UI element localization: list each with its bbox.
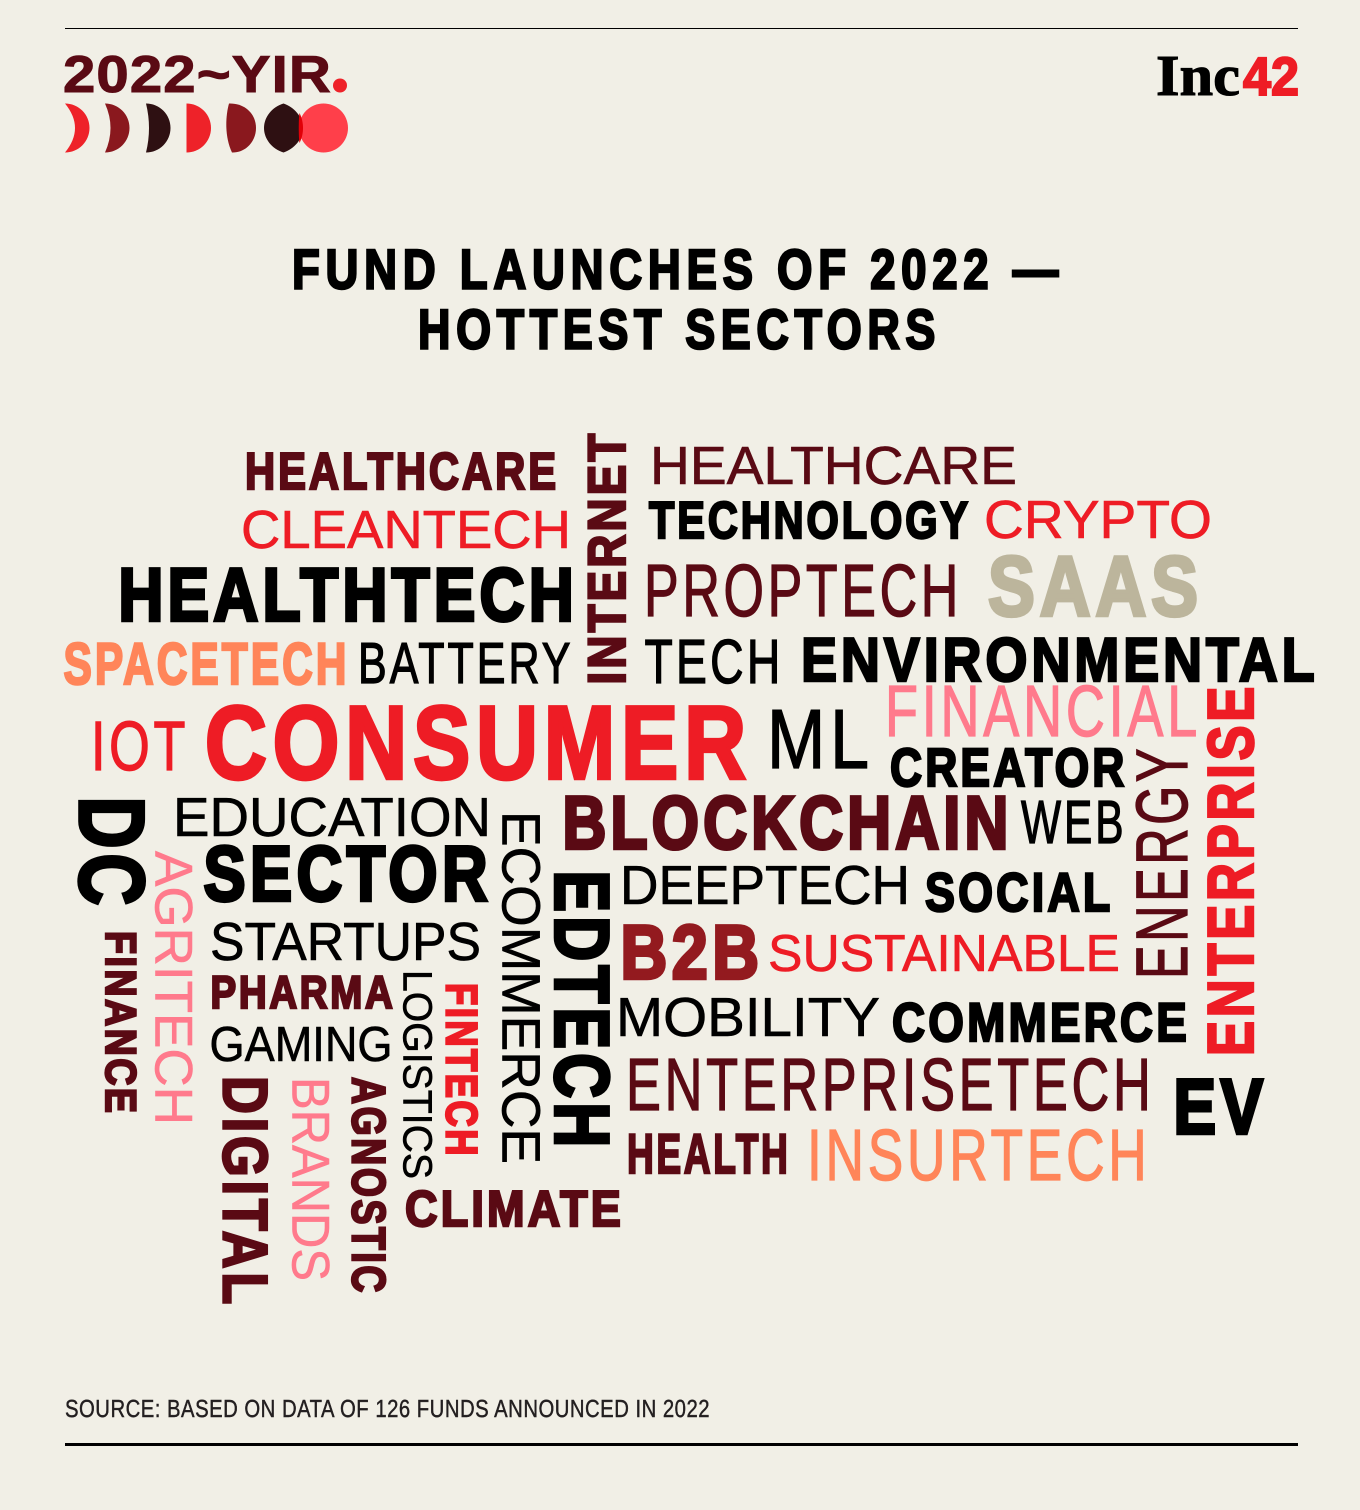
logo wordmark: 2022~YIR <box>63 46 332 104</box>
logo dot <box>333 78 347 92</box>
word: EDTECH: EDTECH <box>538 870 624 1152</box>
word: TECH: TECH <box>644 627 784 697</box>
word: GAMING: GAMING <box>210 1017 392 1072</box>
word: EV: EV <box>1174 1062 1268 1150</box>
word: FINANCIAL: FINANCIAL <box>885 671 1201 752</box>
word: LOGISTICS: LOGISTICS <box>394 970 440 1179</box>
word: SECTOR: SECTOR <box>204 830 492 918</box>
word: FINTECH: FINTECH <box>436 983 486 1158</box>
word: B2B: B2B <box>620 910 764 996</box>
word: ENTERPRISE: ENTERPRISE <box>1194 683 1267 1056</box>
word: BRANDS: BRANDS <box>280 1077 340 1281</box>
word: HEALTH: HEALTH <box>627 1122 790 1185</box>
source note: SOURCE: BASED ON DATA OF 126 FUNDS ANNOUNCED IN 2022 <box>65 1396 710 1423</box>
word: BATTERY: BATTERY <box>358 631 574 696</box>
word: DIGITAL: DIGITAL <box>210 1076 280 1308</box>
word: CLIMATE: CLIMATE <box>405 1180 624 1237</box>
word: INTERNET: INTERNET <box>578 430 637 684</box>
word: SOCIAL: SOCIAL <box>925 862 1114 923</box>
word: HEALTHCARE bold: HEALTHCARE <box>245 443 559 501</box>
word: CONSUMER: CONSUMER <box>205 686 752 802</box>
word: CREATOR: CREATOR <box>890 738 1128 798</box>
word: BLOCKCHAIN: BLOCKCHAIN <box>562 780 1012 864</box>
word: CRYPTO: CRYPTO <box>984 490 1212 550</box>
word: HEALTHTECH: HEALTHTECH <box>118 552 578 636</box>
word: ML: ML <box>767 692 874 786</box>
title <box>292 238 1064 360</box>
word: IOT: IOT <box>91 707 189 785</box>
word: ECOMMERCE: ECOMMERCE <box>490 811 550 1164</box>
moon phases <box>65 103 348 153</box>
word: INSURTECH: INSURTECH <box>807 1115 1150 1196</box>
word: SUSTAINABLE: SUSTAINABLE <box>768 925 1120 983</box>
word: DC: DC <box>60 796 162 910</box>
word: AGNOSTIC: AGNOSTIC <box>342 1077 396 1295</box>
word: TECHNOLOGY: TECHNOLOGY <box>649 492 971 550</box>
word: ENERGY: ENERGY <box>1122 745 1203 979</box>
logo: 2022 year in review <box>63 46 348 153</box>
logo: Inc42 <box>1156 43 1299 108</box>
logo text 42: 42 <box>1243 47 1299 107</box>
title: HOTTEST SECTORS <box>418 298 941 360</box>
word: HEALTHCARE light: HEALTHCARE <box>650 436 1017 496</box>
word: CLEANTECH: CLEANTECH <box>241 500 571 560</box>
word: COMMERCE: COMMERCE <box>892 992 1190 1053</box>
word: STARTUPS: STARTUPS <box>210 912 481 972</box>
logo text Inc: Inc <box>1156 43 1240 108</box>
word: SAAS: SAAS <box>988 540 1203 634</box>
word: PROPTECH: PROPTECH <box>644 549 962 632</box>
word: FINANCE: FINANCE <box>96 931 144 1116</box>
title: FUND LAUNCHES OF 2022 — <box>292 238 1064 300</box>
word: EDUCATION: EDUCATION <box>173 786 491 848</box>
word: DEEPTECH: DEEPTECH <box>620 854 910 916</box>
word: WEB: WEB <box>1021 788 1126 856</box>
word: MOBILITY: MOBILITY <box>616 986 880 1048</box>
word: SPACETECH: SPACETECH <box>64 631 350 697</box>
word: ENTERPRISETECH: ENTERPRISETECH <box>626 1043 1154 1126</box>
word cloud: hottest sectors <box>60 430 1318 1308</box>
word: AGRITECH: AGRITECH <box>144 851 202 1125</box>
word: PHARMA: PHARMA <box>210 966 396 1018</box>
